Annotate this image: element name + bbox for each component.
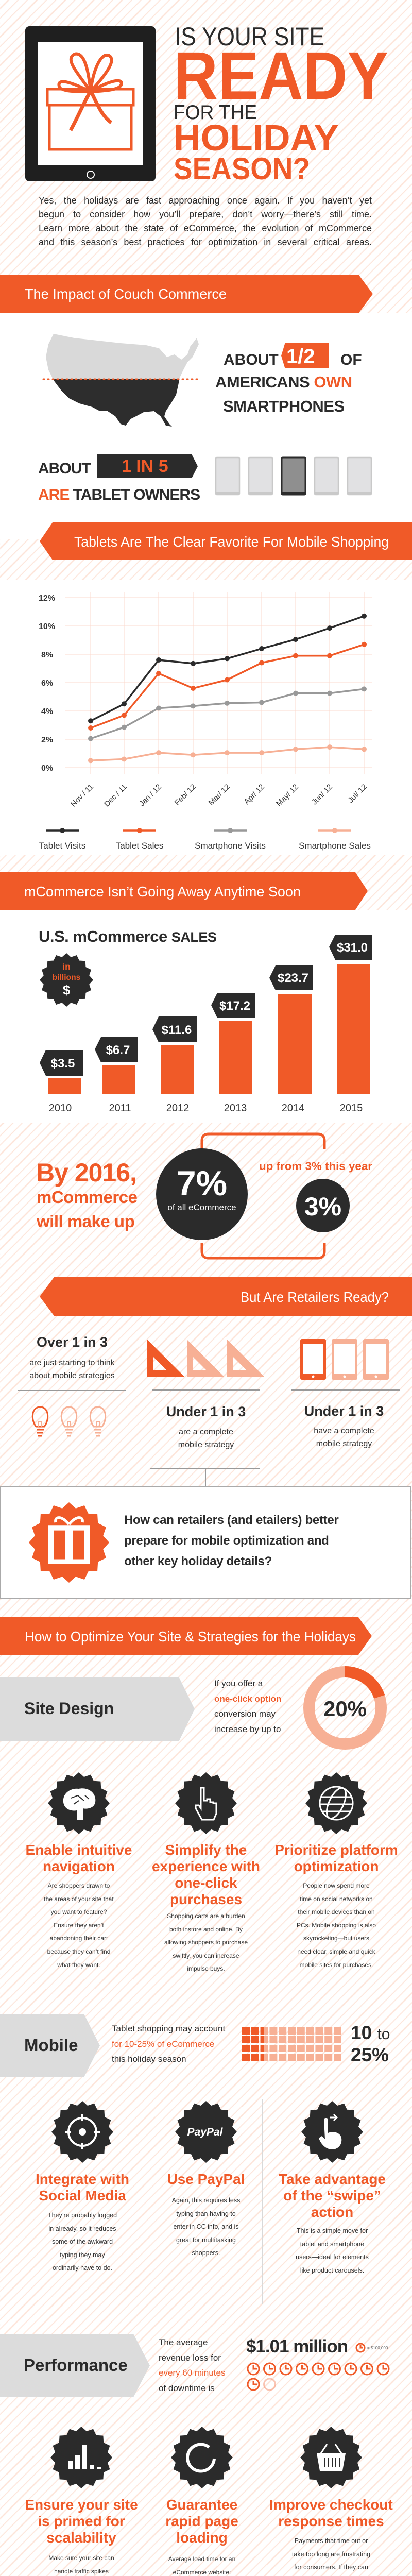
- icon: light bulbs: [32, 1406, 106, 1436]
- text: downtime revenue loss: The average: [159, 2337, 208, 2347]
- line chart: tablet vs smartphone visits and sales: [39, 592, 372, 851]
- line chart: tablet vs smartphone visits and sales: Smartphone Sales: [299, 841, 371, 851]
- tip: use PayPal: typing than having to: [176, 2210, 236, 2217]
- tip: prioritize platform optimization: time on social networks on: [300, 1895, 373, 1903]
- tip: take advantage of swipe: [279, 2101, 386, 2274]
- tab: Site Design: [0, 1677, 195, 1741]
- icon: brain: [48, 1772, 110, 1834]
- stat: by 2016 mCommerce 7%: [36, 1132, 372, 1259]
- donut: 20%: 20%: [323, 1697, 367, 1721]
- tab: Performance: Performance: [24, 2355, 128, 2375]
- bar chart: US mCommerce sales 2010-2015: $17.2: [219, 999, 250, 1013]
- tip: take advantage of swipe: of the “swipe”: [283, 2188, 381, 2204]
- line chart: tablet vs smartphone visits and sales: 0%: [41, 764, 53, 773]
- icon row: 5 tablets, 1 highlighted: [215, 456, 372, 496]
- callout box: how can retailers prepare: other key holiday details?: [124, 1554, 272, 1568]
- text: tablet shopping stat: [112, 2024, 226, 2064]
- tip: integrate with social media: in already, so it reduces: [48, 2225, 116, 2232]
- tip: ensure scalability: [25, 2427, 138, 2575]
- tip: use PayPal: shoppers.: [192, 2249, 220, 2257]
- banner: Tablets Are The Clear Favorite: Tablets Are The Clear Favorite For Mobile Shopping: [74, 534, 389, 550]
- tip: take advantage of swipe: action: [311, 2204, 353, 2220]
- tip: prioritize platform optimization: need clear, simple and quick: [297, 1948, 375, 1955]
- stat: over 1 in 3 just starting: are just starting to think: [29, 1359, 115, 1367]
- tip: improve checkout response times: take too long are frustrating: [292, 2551, 370, 2558]
- icon: gift starburst: [29, 1502, 109, 1583]
- icon: swipe hand: [301, 2101, 363, 2163]
- tip: simplify one-click purchases: Simplify the: [165, 1842, 247, 1858]
- stat: under 1 in 3 complete mobile strategy (triangles): [147, 1340, 264, 1449]
- line chart: tablet vs smartphone visits and sales: 2%: [41, 736, 53, 744]
- tip: prioritize platform optimization: Prioritize platform: [274, 1842, 398, 1858]
- tip: prioritize platform optimization: skyrocketing—but users: [303, 1935, 369, 1942]
- tip: enable intuitive navigation: abandoning their cart: [50, 1935, 108, 1942]
- icon: loading circle: [171, 2427, 233, 2488]
- tip: simplify one-click purchases: Shopping carts are a burden: [167, 1912, 245, 1920]
- stat: about 1/2 own smartphones: OF: [340, 351, 362, 368]
- banner: Tablets Are The Clear Favorite: [40, 522, 412, 560]
- bar chart: US mCommerce sales 2010-2015: 2011: [109, 1103, 131, 1114]
- tip: simplify one-click purchases: one-click: [175, 1875, 237, 1891]
- title: SEASON?: [174, 151, 310, 185]
- text: one-click option stat: one-click option: [214, 1694, 281, 1703]
- tip: integrate with social media: some of the awkward: [52, 2238, 113, 2245]
- banner: But Are Retailers Ready?: But Are Retailers Ready?: [241, 1289, 389, 1305]
- stat: by 2016 mCommerce 7%: of all eCommerce: [167, 1202, 236, 1212]
- tip: use PayPal: enter in CC info, and is: [173, 2223, 239, 2230]
- tip: use PayPal: [167, 2101, 245, 2257]
- line chart: tablet vs smartphone visits and sales: Jan / 12: [138, 783, 163, 808]
- tab: Site Design: Site Design: [24, 1699, 114, 1718]
- bar chart: US mCommerce sales 2010-2015: $11.6: [162, 1023, 192, 1037]
- line chart: tablet vs smartphone visits and sales: Apr/ 12: [243, 783, 266, 806]
- text: downtime revenue loss: [159, 2337, 225, 2393]
- text: one-click option stat: conversion may: [214, 1709, 276, 1719]
- stat: 1 in 5 tablet owners: [38, 454, 200, 503]
- tip: integrate with social media: They’re probably logged: [48, 2212, 117, 2219]
- stat: by 2016 mCommerce 7%: will make up: [37, 1212, 134, 1231]
- icon: PayPal: PayPal: [187, 2126, 224, 2138]
- tip: simplify one-click purchases: allowing shoppers to purchase: [164, 1939, 248, 1946]
- line chart: tablet vs smartphone visits and sales: Nov / 11: [69, 783, 95, 809]
- stat: 1 in 5 tablet owners: ARE TABLET OWNERS: [38, 486, 200, 503]
- text: downtime revenue loss: every 60 minutes: [159, 2368, 225, 2378]
- tip: ensure scalability: handle traffic spikes: [54, 2568, 109, 2575]
- bar chart: US mCommerce sales 2010-2015: $3.5: [51, 1057, 75, 1071]
- tip: use PayPal: Use PayPal: [167, 2171, 245, 2187]
- stat: about 1/2 own smartphones: [215, 343, 362, 415]
- connector line: [150, 1468, 260, 1486]
- stat: under 1 in 3 complete mobile strategy (triangles): Under 1 in 3: [166, 1404, 246, 1419]
- tip: take advantage of swipe: Take advantage: [279, 2171, 386, 2187]
- stat: under 1 in 3 complete mobile strategy (triangles): are a complete: [179, 1428, 233, 1436]
- tip: ensure scalability: Ensure your site: [25, 2497, 138, 2513]
- tip: integrate with social media: [36, 2101, 129, 2272]
- stat: under 1 in 3 have complete mobile strategy (phones): Under 1 in 3: [304, 1403, 384, 1419]
- icon: basket: [300, 2427, 362, 2488]
- bar chart: US mCommerce sales 2010-2015: 2013: [224, 1103, 247, 1114]
- tip: simplify one-click purchases: purchases: [170, 1891, 242, 1907]
- tip: use PayPal: great for multitasking: [176, 2236, 236, 2244]
- bar chart: US mCommerce sales 2010-2015: $23.7: [278, 971, 308, 985]
- title: IS YOUR SITE: [175, 22, 324, 51]
- text: one-click option stat: increase by up to: [214, 1724, 281, 1734]
- text: downtime revenue loss: revenue loss for: [159, 2352, 221, 2363]
- stat: $1.01 million with clocks: = $100,000: [367, 2346, 388, 2350]
- stat: about 1/2 own smartphones: ABOUT: [224, 351, 279, 368]
- tip: ensure scalability: scalability: [46, 2530, 116, 2546]
- line chart: tablet vs smartphone visits and sales: Smartphone Visits: [195, 841, 266, 851]
- stat: under 1 in 3 have complete mobile strategy (phones): have a complete: [314, 1427, 374, 1435]
- tip: rapid page loading: Average load time for an: [168, 2555, 235, 2563]
- title: HOLIDAY: [174, 118, 339, 159]
- callout box: how can retailers prepare: [0, 1486, 411, 1599]
- text: downtime revenue loss: of downtime is: [159, 2383, 215, 2393]
- text: one-click option stat: [214, 1679, 281, 1734]
- tip: enable intuitive navigation: Enable intuitive: [26, 1842, 132, 1858]
- stat: 10 to 25%: 10 to: [351, 2022, 390, 2043]
- line chart: tablet vs smartphone visits and sales: 4%: [41, 707, 53, 716]
- tip: use PayPal: Again, this requires less: [172, 2197, 240, 2204]
- stat: about 1/2 own smartphones: AMERICANS OWN: [215, 373, 352, 391]
- tablet with gift icon: [25, 26, 156, 181]
- tip: improve checkout response times: Payments that time out or: [295, 2537, 368, 2545]
- tip: enable intuitive navigation: what they want.: [57, 1961, 100, 1969]
- tip: integrate with social media: ordinarily have to do.: [53, 2264, 112, 2272]
- banner: mCommerce Isn't Going Away: mCommerce Isn’t Going Away Anytime Soon: [24, 884, 301, 900]
- tip: improve checkout response times: for consumers. If they can: [294, 2564, 368, 2571]
- tab: Mobile: Mobile: [24, 2036, 78, 2055]
- stat: under 1 in 3 have complete mobile strategy (phones): mobile strategy: [316, 1439, 372, 1448]
- bar chart: US mCommerce sales 2010-2015: $6.7: [106, 1043, 130, 1057]
- callout box: how can retailers prepare: How can retailers (and etailers) better: [124, 1513, 338, 1527]
- tip: improve checkout response times: Improve checkout: [269, 2497, 393, 2513]
- line chart: tablet vs smartphone visits and sales: Feb/ 12: [173, 783, 198, 807]
- tip: take advantage of swipe: This is a simple move for: [297, 2227, 368, 2234]
- line chart: tablet vs smartphone visits and sales: 10%: [39, 622, 55, 631]
- tip: take advantage of swipe: tablet and smartphone: [300, 2241, 364, 2248]
- tab: Mobile: [0, 2014, 100, 2077]
- stat: $1.01 million with clocks: $1.01 million: [246, 2336, 348, 2357]
- stat: over 1 in 3 just starting: about mobile strategies: [29, 1371, 115, 1380]
- stat: under 1 in 3 have complete mobile strategy (phones): [291, 1339, 400, 1448]
- tip: ensure scalability: is primed for: [38, 2513, 125, 2529]
- line chart: tablet vs smartphone visits and sales: Mar/ 12: [207, 783, 232, 807]
- tip: rapid page loading: Guarantee: [166, 2497, 237, 2513]
- line chart: tablet vs smartphone visits and sales: Tablet Visits: [39, 841, 85, 851]
- badge: in billions $: $: [63, 982, 71, 998]
- intro paragraph: Yes, the holidays are fast approaching once again. If you haven’t yet: [39, 195, 372, 206]
- grid chart: 10 to 25%: [242, 2027, 341, 2061]
- banner: How to Optimize Your Site: [0, 1617, 372, 1655]
- badge: in billions $: [40, 953, 93, 1007]
- callout box: how can retailers prepare: prepare for mobile optimization and: [124, 1534, 329, 1548]
- tip: simplify one-click purchases: [152, 1772, 260, 1972]
- intro paragraph: [39, 195, 372, 247]
- icon: PayPal: [175, 2101, 237, 2163]
- text: one-click option stat: If you offer a: [214, 1679, 263, 1688]
- line chart: tablet vs smartphone visits and sales: May/ 12: [274, 783, 300, 808]
- stat: over 1 in 3 just starting: Over 1 in 3: [37, 1334, 108, 1350]
- line chart: tablet vs smartphone visits and sales: Jun/ 12: [310, 783, 334, 807]
- tip: enable intuitive navigation: [26, 1772, 132, 1969]
- stat: 10 to 25%: [351, 2022, 390, 2065]
- stat: by 2016 mCommerce 7%: mCommerce: [37, 1188, 137, 1207]
- line chart: tablet vs smartphone visits and sales: 12%: [39, 594, 55, 603]
- title: FOR THE: [174, 101, 257, 124]
- line chart: tablet vs smartphone visits and sales: Dec / 11: [102, 783, 129, 809]
- banner: The Impact of Couch Commerce: The Impact of Couch Commerce: [25, 286, 227, 302]
- stat: 1 in 5 tablet owners: ABOUT: [38, 460, 91, 477]
- bar chart: US mCommerce sales 2010-2015: 2015: [340, 1103, 363, 1114]
- tip: enable intuitive navigation: the areas of your site that: [44, 1895, 114, 1903]
- tip: prioritize platform optimization: PCs. Mobile shopping is also: [297, 1922, 376, 1929]
- line chart: tablet vs smartphone visits and sales: 8%: [41, 651, 53, 659]
- banner: But Are Retailers Ready?: [40, 1277, 412, 1316]
- stat: 1 in 5 tablet owners: 1 IN 5: [122, 456, 168, 476]
- tip: enable intuitive navigation: Ensure they aren’t: [54, 1922, 104, 1929]
- banner: mCommerce Isn't Going Away: [0, 872, 368, 910]
- donut: 20%: [303, 1666, 387, 1750]
- intro paragraph: and this season’s best practices for optimization in several critical areas.: [39, 237, 372, 247]
- stat: about 1/2 own smartphones: 1/2: [286, 345, 315, 368]
- tip: enable intuitive navigation: navigation: [43, 1858, 115, 1874]
- stat: about 1/2 own smartphones: SMARTPHONES: [223, 397, 345, 415]
- US map half smartphone owners: [42, 334, 199, 427]
- tip: rapid page loading: [130, 2427, 274, 2576]
- bar chart: US mCommerce sales 2010-2015: 2010: [49, 1103, 72, 1114]
- line chart: tablet vs smartphone visits and sales: 6%: [41, 679, 53, 688]
- tip: improve checkout response times: response times: [278, 2513, 384, 2529]
- badge: in billions $: billions: [53, 973, 81, 982]
- intro paragraph: begun to consider how you’ll prepare, don’t worry—there’s still time.: [39, 209, 372, 219]
- tip: take advantage of swipe: like product carousels.: [300, 2267, 364, 2274]
- text: tablet shopping stat: Tablet shopping may account: [112, 2024, 225, 2033]
- tip: rapid page loading: eCommerce website:: [173, 2569, 231, 2576]
- tip: ensure scalability: Make sure your site can: [48, 2554, 114, 2562]
- tip: prioritize platform optimization: People now spend more: [303, 1882, 370, 1889]
- badge: in billions $: in: [62, 961, 71, 972]
- stat: 10 to 25%: 25%: [351, 2044, 389, 2065]
- bar chart: US mCommerce sales 2010-2015: 2014: [282, 1103, 304, 1114]
- bar chart: US mCommerce sales 2010-2015: [40, 935, 372, 1114]
- bar chart: US mCommerce sales 2010-2015: 2012: [166, 1103, 189, 1114]
- heading: U.S. mCommerce sales: U.S. mCommerce SALES: [39, 927, 216, 945]
- stat: by 2016 mCommerce 7%: 7%: [177, 1164, 227, 1203]
- tip: simplify one-click purchases: experience with: [152, 1858, 260, 1874]
- bar chart: US mCommerce sales 2010-2015: $31.0: [337, 941, 368, 955]
- tip: prioritize platform optimization: mobile sites for purchases.: [300, 1961, 373, 1969]
- tip: rapid page loading: loading: [176, 2530, 228, 2546]
- text: impulse buys.: [187, 1965, 225, 1972]
- icon: globe: [305, 1772, 367, 1834]
- icon: target: [52, 2101, 113, 2163]
- tip: rapid page loading: rapid page: [165, 2513, 238, 2529]
- tip: prioritize platform optimization: optimization: [294, 1858, 379, 1874]
- intro paragraph: Learn more about the state of eCommerce, the evolution of mCommerce: [39, 223, 372, 233]
- stat: by 2016 mCommerce 7%: 3%: [304, 1192, 341, 1221]
- title: [174, 22, 388, 185]
- text: tablet shopping stat: this holiday season: [112, 2054, 186, 2064]
- tip: take advantage of swipe: users—ideal for elements: [296, 2253, 369, 2261]
- stat: under 1 in 3 complete mobile strategy (triangles): mobile strategy: [178, 1440, 234, 1449]
- text: tablet shopping stat: for 10-25% of eCommerce: [112, 2039, 214, 2048]
- line chart: tablet vs smartphone visits and sales: Jul/ 12: [347, 783, 369, 805]
- tip: improve checkout response times: [259, 2427, 403, 2576]
- banner: The Impact of Couch Commerce: [0, 275, 373, 313]
- stat: over 1 in 3 just starting: [18, 1334, 126, 1436]
- tip: simplify one-click purchases: both instore and online. By: [169, 1926, 243, 1933]
- stat: by 2016 mCommerce 7%: By 2016,: [36, 1158, 136, 1187]
- banner: How to Optimize Your Site: How to Optimize Your Site & Strategies for the Holidays: [25, 1629, 356, 1645]
- tip: prioritize platform optimization: [274, 1772, 398, 1969]
- tip: integrate with social media: Integrate with: [36, 2171, 129, 2187]
- line chart: tablet vs smartphone visits and sales: Tablet Sales: [116, 841, 163, 851]
- tip: enable intuitive navigation: Are shoppers drawn to: [48, 1882, 110, 1889]
- tip: integrate with social media: Social Media: [39, 2188, 126, 2204]
- stat: by 2016 mCommerce 7%: up from 3% this year: [259, 1160, 372, 1173]
- icon: bar chart: [50, 2427, 112, 2488]
- stat: $1.01 million with clocks: [246, 2336, 389, 2391]
- tab: Performance: [0, 2334, 150, 2397]
- white zones (no stripes): [0, 313, 412, 539]
- tip: enable intuitive navigation: because they can’t find: [47, 1948, 110, 1955]
- icon: hand cursor: [175, 1772, 237, 1834]
- tip: enable intuitive navigation: you want to feature?: [51, 1908, 107, 1916]
- tip: prioritize platform optimization: their mobile devices than on: [298, 1908, 375, 1916]
- tip: integrate with social media: typing they may: [60, 2251, 105, 2259]
- tip: simplify one-click purchases: swiftly, you can increase: [173, 1952, 239, 1959]
